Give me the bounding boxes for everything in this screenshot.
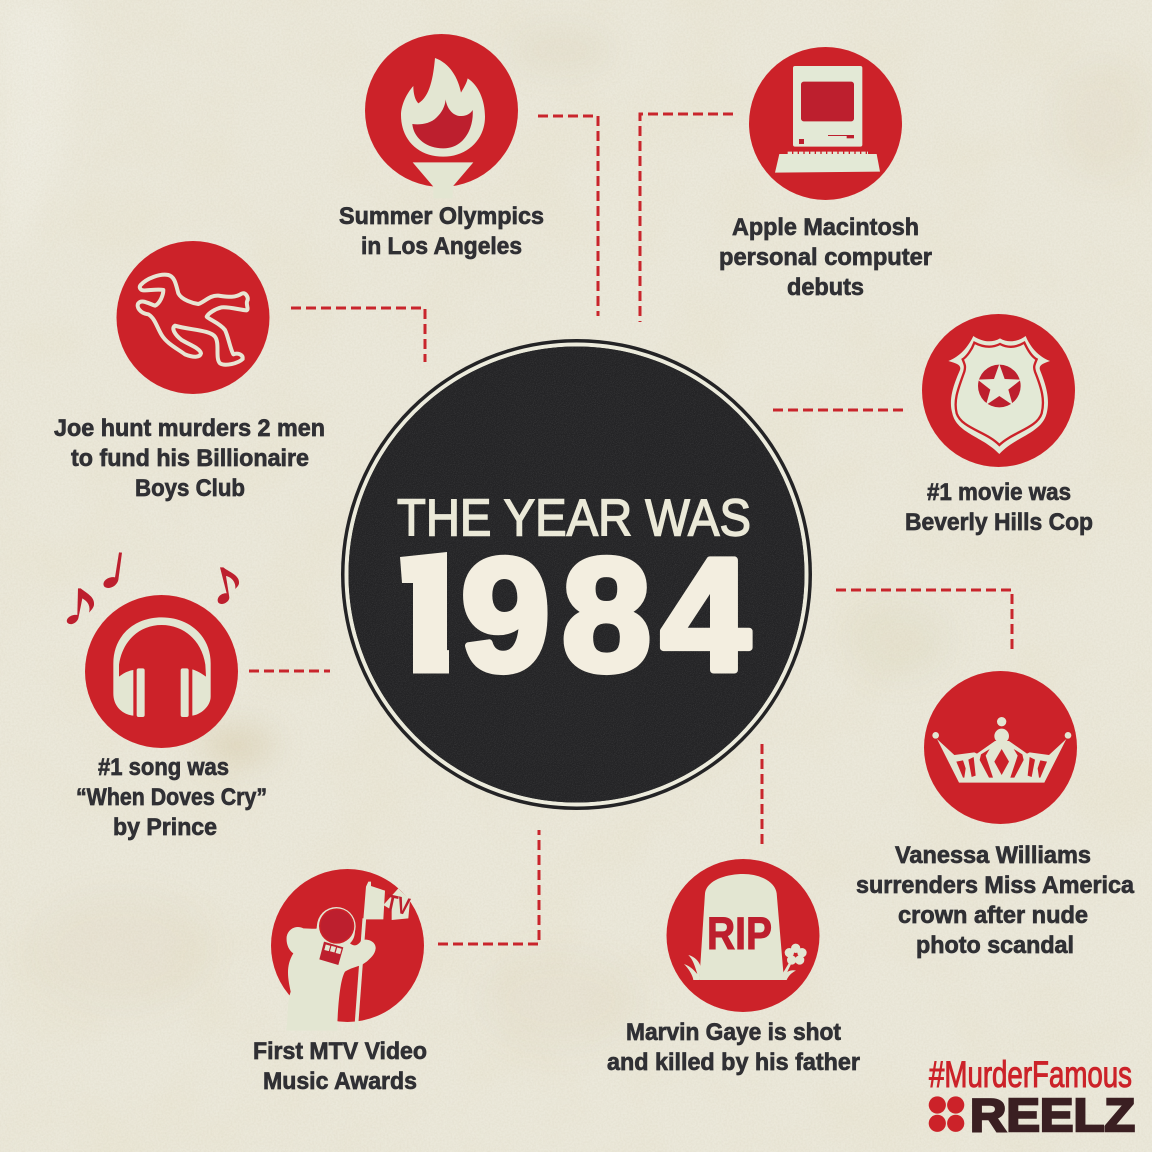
icon: tombstone [684,874,807,980]
panel: Apple Macintosh [719,47,932,301]
icon: pageant crown [932,717,1071,783]
icon: headphones and music notes [67,552,239,717]
wordmark: REELZ [970,1089,1135,1141]
caption [607,1019,860,1076]
icon: moon man astronaut with MTV flag [286,882,412,1031]
caption [54,415,325,502]
dashed connector: Joe Hunt [291,308,425,362]
panel: Summer Olympics [339,34,544,260]
dashed connector: Apple Macintosh [640,114,733,322]
panel: When Doves Cry [67,552,267,841]
caption: Beverly Hills Cop [905,509,1093,536]
dashed connector: Marvin Gaye [760,744,764,845]
caption [76,754,267,841]
logo dots [929,1096,964,1132]
icon: police badge [948,336,1050,454]
panel: Beverly Hills Cop [905,314,1093,536]
caption [719,214,932,301]
caption: Marvin Gaye is shot [626,1019,841,1046]
dashed connector: Beverly Hills Cop [773,408,905,412]
caption: First MTV Video [253,1038,427,1065]
caption: Vanessa Williams [895,842,1091,869]
icon: chalk body outline [138,275,248,365]
caption: Music Awards [263,1068,417,1095]
logo: MurderFamous and REELZ [929,1054,1135,1141]
caption [856,842,1135,959]
caption: photo scandal [916,932,1074,959]
caption: to fund his Billionaire [71,445,309,472]
caption: in Los Angeles [361,233,522,260]
icon: macintosh computer [775,66,880,173]
caption: Apple Macintosh [732,214,919,241]
dashed connector: MTV Awards [438,830,539,944]
panel: Marvin Gaye [607,859,860,1076]
heading: 1984 [400,552,753,676]
caption [339,203,544,260]
dashed connector: When Doves Cry [249,670,330,672]
caption: #1 movie was [927,479,1071,506]
caption: Boys Club [135,475,245,502]
heading: 1984: 1 [380,525,469,704]
tombstone text RIP: RIP [707,908,772,959]
dashed connector: Vanessa Williams [836,590,1012,650]
caption: Summer Olympics [339,203,544,230]
caption: personal computer [719,244,932,271]
caption: #1 song was [98,754,229,781]
icon: moon man astronaut with MTV flag: TV [383,890,412,921]
icon: olympic torch [401,58,485,198]
caption: surrenders Miss America [856,872,1135,899]
heading: the year was: THE YEAR WAS [397,490,751,548]
panel: MTV Video Music Awards [253,869,427,1095]
caption [253,1038,427,1095]
dashed connector: Summer Olympics [538,116,598,316]
panel: Vanessa Williams [856,671,1135,959]
caption: by Prince [113,814,217,841]
caption: crown after nude [898,902,1088,929]
panel: Joe Hunt murders [54,241,325,502]
caption: debuts [787,274,864,301]
central badge: the year was 1984 [340,338,814,812]
caption: and killed by his father [607,1049,860,1076]
caption: “When Doves Cry” [76,784,267,811]
heading: 1984: 984 [461,525,750,704]
caption: Joe hunt murders 2 men [54,415,325,442]
caption [905,479,1093,536]
